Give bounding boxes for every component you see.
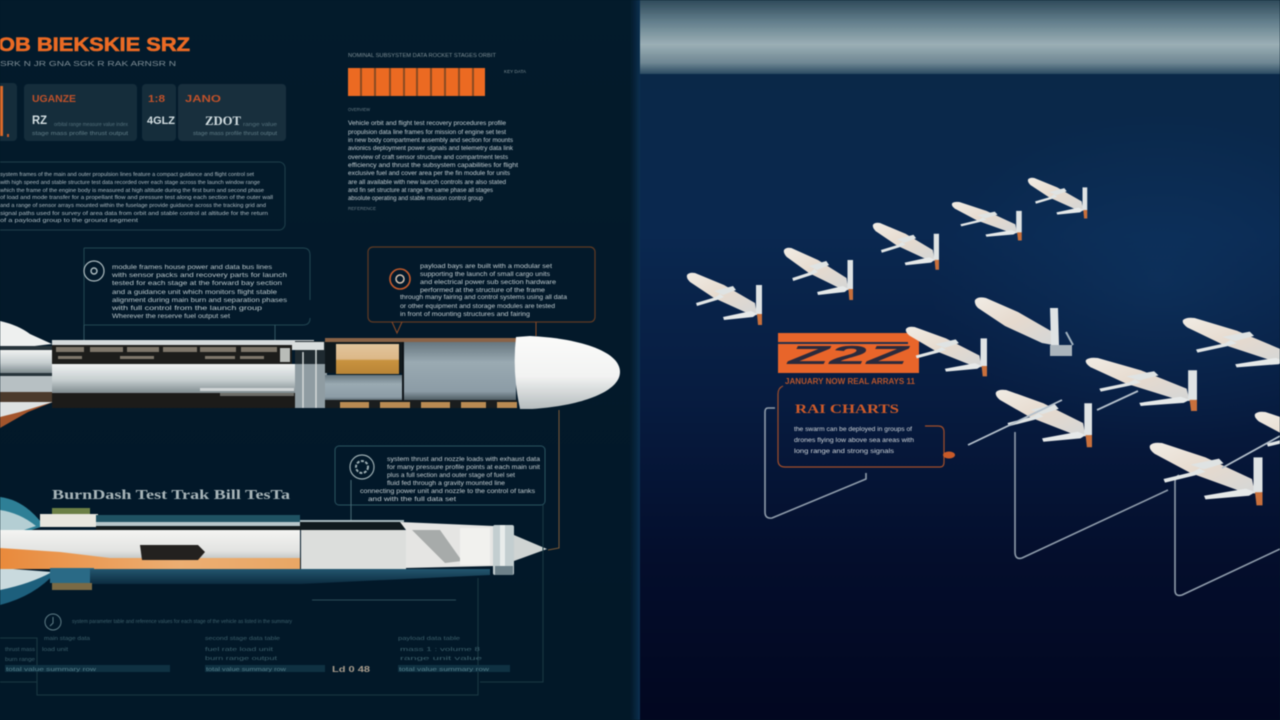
callout text: the swarm can be deployed in groups of [794, 426, 912, 433]
text panel: upper-left description: signal paths used for survey of area data from orbit and stable control at altitude for the return [0, 211, 268, 217]
stat card 3: ZDOT [205, 113, 241, 128]
callout text: long range and strong signals [794, 448, 894, 455]
table 3: range unit value [400, 656, 482, 662]
highlighted values: Ld 0 48 [332, 665, 371, 674]
text panel: upper-left description: which the frame of the engine body is measured at high altitude during the first burn and second phase [0, 188, 264, 194]
drone 10 [1150, 443, 1262, 505]
callout: orange upper-right with icon [368, 247, 595, 336]
top fin [0, 321, 52, 350]
tail section [0, 346, 54, 402]
callout text: for many pressure profile points at each main unit [387, 465, 540, 471]
callout text: and electrical power sub section hardware [420, 280, 557, 286]
small footer: REFERENCE [348, 206, 376, 211]
table 2: second stage data table [205, 636, 280, 642]
callout text [794, 426, 915, 455]
icon: target [84, 261, 104, 281]
stat card 3: range value [243, 122, 277, 128]
table 3: mass 1 : volume 8 [400, 647, 480, 653]
title: OB BIEKSKIE SRZ [0, 35, 190, 56]
main silver tube [52, 364, 310, 393]
drone 9 [996, 390, 1092, 447]
text block: upper-centre with orange banner [348, 53, 526, 211]
drone 7 [906, 327, 987, 376]
paragraph: avionics deployment power signals and telemetry data link [348, 145, 514, 152]
callout frames on the ocean [765, 408, 1280, 595]
stat card 2: 1:8 [148, 94, 166, 105]
nose tip [514, 535, 547, 561]
paragraph: are all available with new launch controls are also stated [348, 179, 507, 186]
callout text: system thrust and nozzle loads with exhaust data [387, 457, 541, 463]
collar [292, 341, 327, 408]
orange dot [943, 452, 955, 458]
top box [52, 508, 90, 516]
callout text: with full control from the launch group [110, 306, 263, 312]
orange banner on ocean: Z2Z [785, 340, 911, 370]
paragraph: absolute operating and stable mission control group [348, 195, 484, 202]
tan payload [336, 344, 399, 374]
callout text: fluid fed through a gravity mounted line [387, 481, 506, 487]
text panel: upper-left description: of load and mode transfer for a propellant flow and pressure test along each section of the outer wall [0, 195, 273, 201]
callout leader: orange line to rocket 2 tip [548, 410, 559, 550]
callout text: and a guidance unit which monitors flight stable [112, 290, 278, 296]
callout text: connecting power unit and nozzle to the control of tanks [360, 489, 535, 495]
callout: swarm data box [778, 386, 955, 467]
stat card 1 [24, 84, 137, 141]
callout: teal lower-right with icon [335, 446, 545, 532]
table 3: payload data table [398, 636, 460, 642]
callout text: alignment during main burn and separation phases [112, 298, 287, 304]
gray cylinder [404, 342, 516, 400]
table 1: main stage data [44, 636, 90, 642]
stat card 3: stage mass profile thrust output [193, 131, 278, 137]
callout text [360, 457, 541, 503]
paragraph: overview of craft sensor structure and compartment tests [348, 154, 508, 161]
table 3 [398, 636, 510, 673]
text panel: upper-left description: system frames of the main and outer propulsion lines feature a compact guidance and flight control set [0, 172, 254, 178]
table 1: burn range [5, 657, 35, 663]
table 1: total value summary row [6, 667, 97, 673]
callout text: and with the full data set [368, 497, 456, 503]
paragraph: propulsion data line frames for mission of engine set test [348, 129, 506, 136]
bottom fin [0, 402, 53, 428]
drone 1 [687, 273, 762, 325]
heading: rocket 2 title: BurnDash Test Trak Bill TesTa [52, 488, 290, 503]
callout: teal upper-left with icon [84, 248, 310, 345]
table 1: load unit [42, 647, 69, 653]
orange segmented banner [348, 68, 485, 96]
callout text: through many fairing and control systems using all data [400, 295, 568, 301]
stat card 1: UGANZE [32, 94, 76, 105]
table 2: total value summary row [206, 667, 287, 673]
table 2: fuel rate load unit [205, 647, 274, 653]
drone 11 [1183, 318, 1280, 373]
orange banner on ocean [778, 333, 919, 373]
text panel: upper-left description: and a range of sensor arrays mounted within the fuselage provide guidance across the tracking grid and [0, 203, 266, 209]
panel: right sky and ocean scene [640, 0, 1280, 720]
stat card 1: orbital range measure value index [54, 122, 128, 128]
table 2 [205, 636, 325, 673]
callout text [400, 264, 568, 318]
table 1 [5, 636, 170, 673]
stat card 1: stage mass profile thrust output [32, 131, 129, 137]
paragraph: efficiency and thrust the subsystem capabilities for flight [348, 162, 518, 169]
table 1: thrust mass [5, 647, 36, 653]
small heading: OVERVIEW [348, 107, 371, 112]
caption: NOMINAL SUBSYSTEM DATA ROCKET STAGES ORBIT [348, 53, 497, 59]
stat card 3: JANO [185, 94, 221, 105]
drone 12 [1255, 412, 1280, 467]
top band [96, 515, 300, 522]
stat card 2: 4GLZ [147, 115, 175, 127]
callout text: Wherever the reserve fuel output set [112, 314, 230, 320]
callout heading: RAI CHARTS [795, 401, 899, 416]
white nose cone [515, 336, 620, 409]
dark capsule [140, 545, 205, 560]
drone 3 [873, 223, 939, 270]
callout text: or other equipment and storage modules are tested [400, 304, 555, 310]
icon: shield [45, 614, 61, 630]
callout text: module frames house power and data bus lines [112, 265, 272, 271]
icon: orange ring [390, 269, 410, 289]
callout text: tested for each stage at the forward bay section [112, 281, 282, 287]
bottom diagram: schematic frames and tables [0, 505, 543, 695]
stat card 3 [178, 84, 286, 141]
drone swarm [687, 178, 1280, 505]
subtitle: SRK N JR GNA SGK R RAK ARNSR N [0, 61, 176, 68]
paragraph [348, 120, 518, 202]
panel: left dark background [0, 0, 640, 720]
drone 8 [1086, 358, 1197, 411]
blue underside [90, 569, 490, 584]
orange exhaust band [0, 548, 300, 569]
table 2: burn range output [205, 656, 278, 662]
stat card 2 [142, 84, 176, 141]
note line: system parameter table and reference values for each stage of the vehicle as listed in the summary [72, 619, 292, 625]
callout text: with sensor packs and recovery parts for launch [111, 273, 287, 279]
stat card 1: RZ [32, 113, 47, 127]
collar [493, 525, 514, 575]
rocket 2: second vehicle [0, 497, 547, 605]
callout text: payload bays are built with a modular set [420, 264, 552, 270]
long thin wings [968, 391, 1280, 468]
drone 6: large wingless body with base [975, 297, 1073, 356]
tan pads [340, 402, 517, 408]
text panel: upper-left description [0, 162, 285, 230]
drone 4 [952, 202, 1022, 240]
drone 2 [784, 248, 853, 300]
table 3: total value summary row [399, 667, 490, 673]
paragraph: Vehicle orbit and flight test recovery procedures profile [348, 120, 507, 127]
drone 5 [1028, 178, 1087, 219]
callout text: plus a full section and outer stage of fuel set [387, 473, 515, 479]
small side label: KEY DATA [504, 69, 526, 74]
white body [0, 530, 300, 560]
forward section [325, 338, 520, 342]
middle white section [301, 530, 406, 569]
callout text: in front of mounting structures and fairing [400, 312, 530, 318]
left fins [0, 497, 44, 540]
stat cards row [0, 83, 286, 141]
banner caption: JANUARY NOW REAL ARRAYS 11 [785, 377, 916, 386]
top strip [52, 340, 314, 345]
forward section [400, 522, 494, 568]
text panel: upper-left description: of a payload group to the ground segment [0, 218, 139, 224]
paragraph: in new body compartment assembly and section for mounts [348, 137, 513, 144]
frames [0, 505, 543, 695]
paragraph: and fin set structure at range the same phase all stages [348, 187, 493, 194]
machinery band [52, 345, 292, 364]
rocket 1: cutaway launch vehicle [0, 321, 620, 428]
paragraph: exclusive fuel and cover area per the fin module for units [348, 170, 510, 177]
callout text: supporting the launch of small cargo units [420, 272, 550, 278]
callout text: drones flying low above sea areas with [794, 437, 915, 444]
text panel: upper-left description: with high speed and stable structure test data recorded over each stage across the launch window range [0, 180, 260, 186]
stat card 0 [0, 83, 17, 141]
callout text [110, 265, 287, 320]
callout text: performed at the structure of the frame [420, 288, 546, 294]
icon: gear [350, 455, 374, 479]
